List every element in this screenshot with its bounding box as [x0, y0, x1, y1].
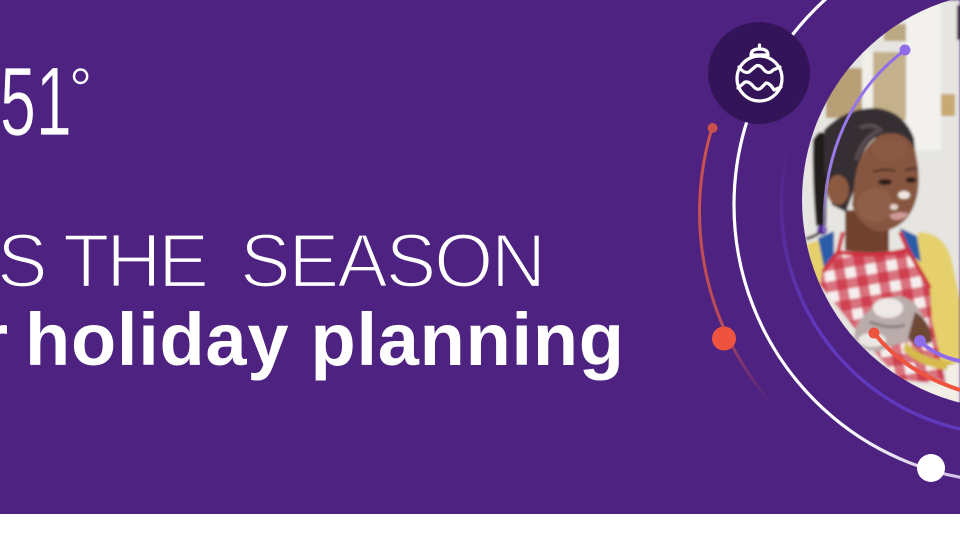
photo background	[800, 0, 960, 410]
purple arc over photo	[914, 335, 960, 361]
white plate on table	[912, 362, 960, 402]
white orbit ring	[734, 0, 960, 482]
photo: child baking in circular frame	[800, 0, 960, 410]
logo: 51 degrees: °	[69, 57, 92, 122]
lavender arc over photo	[824, 44, 910, 232]
hair	[824, 108, 916, 212]
inner purple ring	[781, 150, 960, 429]
hair highlight	[856, 125, 880, 160]
heading: holiday planning line: holiday planning	[25, 298, 624, 381]
large red orbit dot	[712, 326, 736, 350]
white orbit dot	[917, 454, 945, 482]
yellow shirt	[806, 232, 960, 368]
apron	[820, 248, 946, 384]
icon: holiday ornament	[737, 45, 782, 101]
logo: 51 degrees: 51	[0, 48, 72, 156]
neck	[845, 210, 889, 254]
heading: season line: THE	[63, 219, 209, 304]
heading: season line: SEASON	[240, 219, 546, 304]
badge circle	[708, 22, 810, 124]
small red orbit dot	[708, 123, 718, 133]
apron straps and trim	[823, 232, 930, 288]
ear	[827, 175, 849, 205]
red orbit arc	[700, 128, 773, 405]
floury hands	[854, 296, 960, 370]
kitchen window and cabinets	[826, 0, 960, 150]
heading: season line	[0, 219, 546, 304]
ornament badge	[708, 22, 810, 124]
blue straps	[818, 228, 921, 268]
face	[852, 133, 919, 232]
braid and bead	[806, 132, 828, 239]
red arc over photo	[868, 328, 960, 390]
